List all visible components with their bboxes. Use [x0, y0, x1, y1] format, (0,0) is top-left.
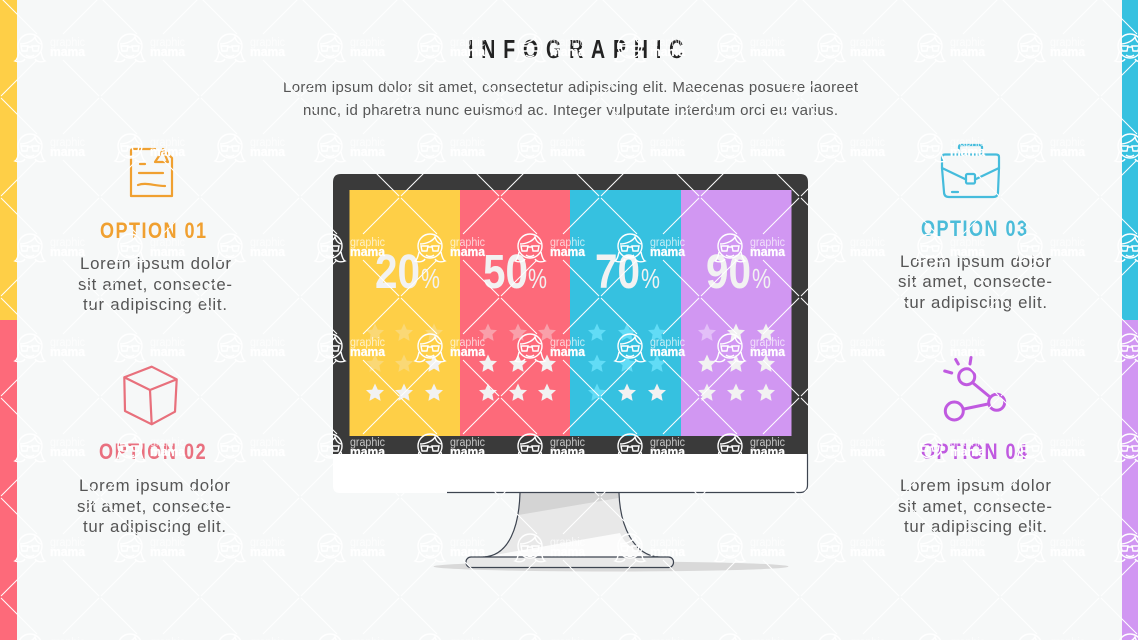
icon: document [131, 149, 172, 196]
intro text: Lorem ipsum dolor sit amet, consectetur adipiscing elit. Maecenas posuere laoreet [283, 79, 859, 96]
right side colour bars [1122, 0, 1138, 640]
screen column: 90%: 90 [706, 246, 751, 299]
title: INFOGRAPHIC [468, 34, 691, 64]
intro text: nunc, id pharetra nunc euismod ac. Integer vulputate interdum orci eu varius. [303, 102, 838, 119]
screen column: 50% [460, 190, 570, 436]
panel: option 01 [78, 149, 232, 314]
screen column: 20% [350, 190, 460, 436]
heading: option 01: OPTION 01 [100, 219, 207, 243]
monitor shadow [434, 562, 788, 572]
text: option 04 description: Lorem ipsum dolor [900, 476, 1051, 495]
heading: option 04: OPTION 04 [921, 440, 1028, 464]
screen column: 50%: 50 [483, 246, 528, 299]
left side colour bars [0, 0, 17, 640]
screen column: 90%: % [752, 263, 771, 294]
text: option 02 description [77, 476, 231, 536]
screen column: 90% [681, 190, 792, 436]
text: option 04 description: tur adipiscing elit. [904, 517, 1047, 536]
text: option 04 description: sit amet, consecte- [898, 497, 1052, 516]
text: option 03 description [898, 252, 1052, 312]
monitor chin [333, 454, 808, 493]
text: option 02 description: sit amet, consecte- [77, 497, 231, 516]
screen column: 20%: % [421, 263, 440, 294]
text: option 03 description: tur adipiscing elit. [904, 293, 1047, 312]
monitor [333, 174, 808, 572]
text: option 02 description: Lorem ipsum dolor [79, 476, 230, 495]
text: option 01 description: sit amet, consecte- [78, 275, 232, 294]
screen column: 20%: 20 [375, 246, 420, 299]
panel: option 04 [898, 358, 1052, 536]
screen column: 50%: % [528, 263, 547, 294]
heading: option 03: OPTION 03 [921, 217, 1028, 241]
text: option 01 description: tur adipiscing elit. [83, 295, 227, 314]
icon: briefcase [942, 145, 999, 197]
text: option 01 description: Lorem ipsum dolor [80, 254, 231, 273]
text: option 03 description: Lorem ipsum dolor [900, 252, 1051, 271]
screen column: 70% [570, 190, 681, 436]
panel: option 03 [898, 145, 1052, 312]
icon: network nodes [945, 358, 1005, 420]
panel: option 02 [77, 367, 231, 536]
heading: option 02: OPTION 02 [99, 440, 207, 464]
monitor bezel [333, 174, 808, 454]
intro text [283, 79, 859, 119]
text: option 02 description: tur adipiscing elit. [83, 517, 226, 536]
monitor stand [466, 493, 674, 568]
screen column: 70%: % [641, 263, 660, 294]
icon: cube [124, 367, 177, 424]
text: option 03 description: sit amet, consecte- [898, 272, 1052, 291]
text: option 04 description [898, 476, 1052, 536]
screen column: 70%: 70 [595, 246, 640, 299]
text: option 01 description [78, 254, 232, 314]
